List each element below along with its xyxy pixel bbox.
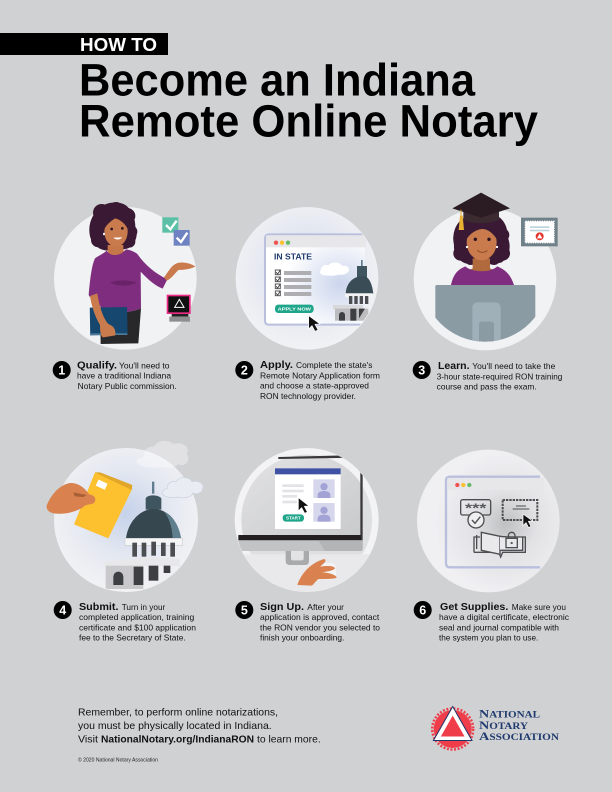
text: learn: 3-hour state-required RON training [437, 371, 563, 381]
text: sign up: application is approved, contact [260, 612, 380, 622]
text: apply: and choose a state-approved [260, 381, 369, 391]
text: submit: fee to the Secretary of State. [79, 633, 186, 643]
text: learn: Learn. [438, 361, 470, 372]
text: apply: Remote Notary Application form [260, 370, 380, 380]
text: get supplies: Get Supplies. [440, 602, 509, 613]
logo wordmark [479, 709, 560, 743]
text: apply: Apply. [260, 360, 293, 371]
footer note: Visit [78, 734, 98, 745]
text: get supplies [439, 602, 569, 643]
text: sign up [260, 602, 380, 643]
illustration: hand submitting envelope to capitol [47, 441, 203, 592]
text: apply [260, 360, 380, 401]
text: sign up: Sign Up. [260, 602, 304, 613]
illustration: desktop monitor and hand on mouse [232, 448, 379, 594]
panel: step 5 sign up [232, 448, 380, 643]
logo wordmark: ASSOCIATION [479, 731, 560, 743]
footer note: Remember, to perform online notarizations, [78, 708, 278, 719]
logo wordmark: NATIONAL [479, 709, 540, 721]
step number 3: 3 [418, 364, 425, 378]
step number 4 [54, 601, 72, 619]
heading tag: HOW TO [0, 33, 168, 55]
title: Become an Indiana [79, 55, 476, 106]
step number 3 [413, 361, 431, 379]
panel: step 1 qualify [53, 202, 197, 391]
text: submit: Submit. [79, 602, 119, 613]
text: qualify: have a traditional Indiana [77, 370, 171, 380]
footer note [78, 708, 321, 745]
text: learn [437, 361, 563, 392]
text: qualify: Qualify. [77, 360, 117, 372]
illustration: application form browser window: APPLY NOW [278, 307, 312, 312]
text: get supplies: the system you plan to use. [439, 633, 538, 643]
illustration: browser window with password, seal and journal icons: *** [465, 502, 486, 516]
text: learn: You'll need to take the [472, 361, 556, 371]
footer note: to learn more. [257, 734, 321, 745]
text: submit: Turn in your [122, 602, 166, 612]
text: qualify: You'll need to [119, 360, 170, 370]
step number 5: 5 [241, 604, 248, 618]
illustration: desktop monitor and hand on mouse: START [286, 516, 301, 521]
text: get supplies: seal and journal compatible with [439, 622, 559, 632]
text: sign up: After your [307, 602, 344, 612]
heading tag: HOW TO: HOW TO [80, 35, 157, 55]
panel: step 6 get supplies [414, 450, 569, 643]
copyright: © 2020 National Notary Association [78, 757, 158, 764]
panel: step 3 learn [413, 193, 563, 392]
footer note: NationalNotary.org/IndianaRON [101, 734, 254, 745]
title [79, 55, 538, 147]
logo wordmark: NOTARY [479, 720, 529, 732]
step number 5 [235, 601, 253, 619]
step number 4: 4 [59, 604, 66, 618]
step number 2 [235, 361, 253, 379]
text: apply: Complete the state's [296, 360, 372, 370]
illustration: browser window with password, seal and journal icons [417, 450, 560, 592]
illustration: application form browser window [236, 207, 378, 350]
text: apply: RON technology provider. [260, 391, 356, 401]
text: submit: certificate and $100 application [79, 622, 196, 632]
illustration: application form browser window: IN STATE [274, 252, 312, 262]
text: sign up: the RON vendor you selected to [260, 622, 380, 632]
panel: step 4 submit [47, 441, 203, 643]
text: submit: completed application, training [79, 612, 195, 622]
step number 1: 1 [58, 364, 65, 378]
text: get supplies: have a digital certificate, electronic [439, 612, 569, 622]
step number 6 [414, 601, 432, 619]
illustration: notary woman with folder, checkmarks and stamp [54, 202, 197, 350]
text: learn: course and pass the exam. [437, 382, 537, 392]
step number 2: 2 [241, 364, 248, 378]
panel: step 2 apply [235, 207, 380, 401]
step number 1 [53, 361, 71, 379]
logo: National Notary Association [432, 706, 560, 750]
text: qualify: Notary Public commission. [78, 381, 177, 391]
text: qualify [77, 360, 177, 391]
text: get supplies: Make sure you [512, 602, 566, 612]
text: sign up: finish your onboarding. [260, 633, 344, 643]
step number 6: 6 [419, 604, 426, 618]
footer note: you must be physically located in Indiana. [78, 721, 272, 732]
text: submit [79, 602, 196, 643]
title: Remote Online Notary [79, 96, 538, 147]
icon: red seal with triangle [432, 706, 473, 750]
illustration: graduate at computer with certificate [414, 193, 558, 350]
